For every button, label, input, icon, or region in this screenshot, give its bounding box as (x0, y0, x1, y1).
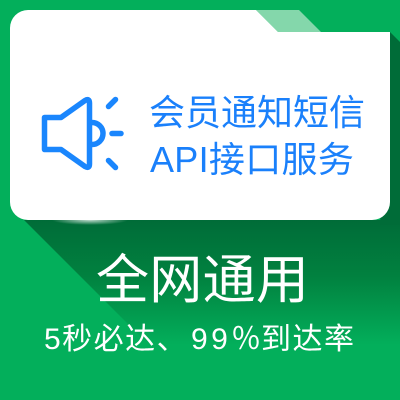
card shadow (24, 32, 400, 345)
white card (10, 10, 390, 220)
subtitle: 99 (191, 323, 231, 356)
heading: service name line 2: API接口服务 (150, 139, 354, 180)
heading: service name line 1: 会员通知短信 (149, 92, 365, 133)
icon: speaker (44, 100, 121, 168)
subtitle: 5秒必达、 (44, 323, 188, 356)
subtitle: ％ (231, 323, 261, 356)
folded corner (256, 10, 321, 32)
subtitle: 到达率 (261, 323, 356, 356)
title: 全网通用 (96, 251, 309, 310)
